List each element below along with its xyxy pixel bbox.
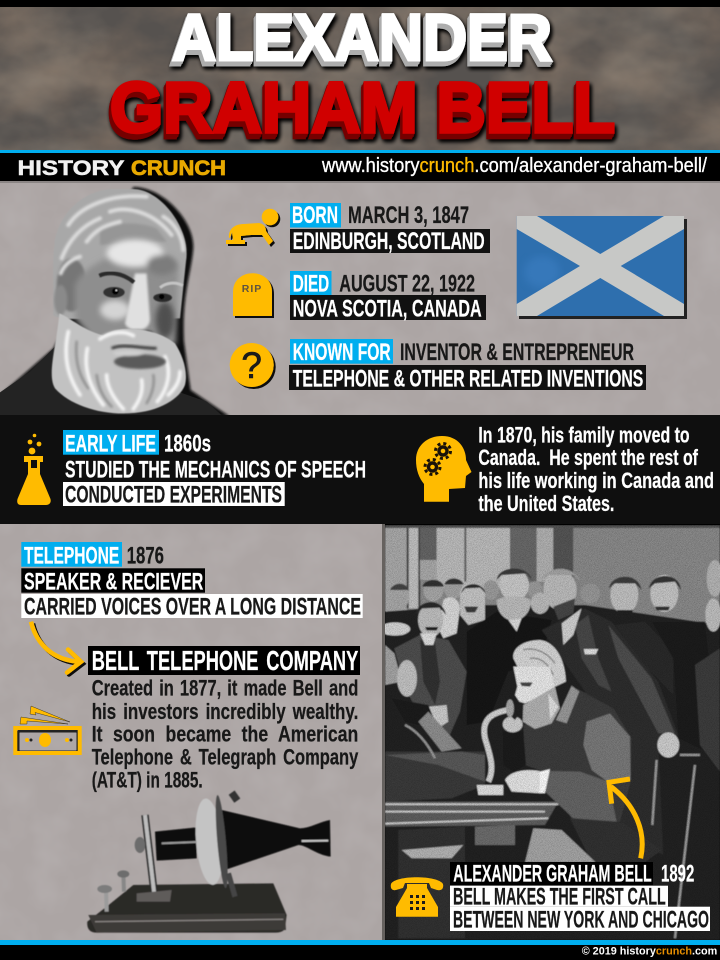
- torso: [523, 688, 632, 822]
- forehead highlight: [100, 239, 177, 338]
- company heading: [88, 645, 360, 676]
- man at left desk: [385, 645, 462, 752]
- panel: telephone background: [0, 524, 385, 940]
- chair: [652, 755, 700, 938]
- info: died: [233, 271, 486, 323]
- wall: [385, 525, 720, 625]
- panel: biography background: [0, 181, 720, 415]
- telephone text: TELEPHONE: [24, 542, 119, 569]
- beard: [523, 687, 560, 729]
- flag of Scotland: [517, 216, 687, 319]
- invention year: 1876: [127, 542, 164, 569]
- hand on table: [505, 770, 542, 793]
- caption: name: [450, 862, 653, 885]
- beard: [52, 313, 186, 413]
- info: born: EDINBURGH, SCOTLAND: [293, 228, 485, 255]
- speaker and receiver: [21, 568, 205, 593]
- family move paragraph: [478, 422, 714, 516]
- info: known for: [230, 339, 646, 393]
- experiments: [63, 482, 285, 506]
- portrait coat: [0, 347, 223, 417]
- face: [513, 667, 555, 703]
- long distance: [21, 594, 363, 618]
- info: born: [226, 202, 490, 255]
- highlights: [302, 838, 328, 844]
- eyes and brows: [99, 273, 183, 302]
- brand bar: [0, 150, 720, 181]
- nose: [123, 273, 153, 337]
- panel: early life band: [0, 415, 720, 524]
- icon: question mark: ?: [241, 345, 262, 386]
- bowing man: [541, 569, 679, 855]
- photo grain: [385, 525, 720, 940]
- company paragraph: [92, 676, 359, 793]
- Bell at telephone: [477, 640, 662, 862]
- hair highlights: [61, 196, 183, 273]
- caption: first call: [450, 886, 668, 907]
- decade: 1860s: [164, 431, 211, 458]
- collar: [556, 686, 579, 723]
- icon: question mark: [230, 343, 274, 387]
- head with mustache: [460, 583, 486, 625]
- left man: [394, 602, 467, 738]
- device base: [87, 883, 287, 933]
- early life text: CONDUCTED EXPERIMENTS: [65, 482, 282, 509]
- telephone text: SPEAKER & RECIEVER: [24, 568, 203, 595]
- death place: [290, 295, 486, 320]
- icon: tombstone: RIP: [242, 283, 262, 295]
- family move paragraph: the United States.: [478, 491, 614, 516]
- label: EARLY LIFE: [63, 430, 159, 455]
- company paragraph: Created in 1877, it made Bell and: [92, 676, 358, 701]
- bearded man: [467, 568, 552, 725]
- portrait of Bell: [0, 187, 230, 417]
- info: known for: KNOWN FOR: [293, 339, 391, 366]
- death date: AUGUST 22, 1922: [339, 271, 475, 298]
- company paragraph: Telephone & Telegraph Company: [92, 744, 359, 769]
- title line: ALEXANDER: ALEXANDER: [172, 0, 552, 74]
- icon: money: [15, 706, 80, 753]
- portrait hair: [53, 189, 187, 319]
- arrow: to company: [31, 622, 81, 672]
- studies: STUDIED THE MECHANICS OF SPEECH: [65, 457, 366, 484]
- telephone stand: [484, 710, 508, 782]
- image: Bell telephone device: [87, 793, 331, 933]
- cone: [222, 810, 331, 869]
- right men: [609, 575, 720, 772]
- title: [110, 0, 615, 148]
- lower coat: [570, 818, 662, 862]
- caption: year: 1892: [661, 861, 694, 888]
- icon: telephone: [391, 877, 443, 917]
- header stone banner: [0, 7, 720, 150]
- sleeve: [583, 713, 631, 781]
- early life text: [63, 430, 366, 509]
- label: DIED: [290, 271, 332, 295]
- title line: GRAHAM BELL: GRAHAM BELL: [110, 69, 615, 148]
- website url: www.historycrunch.com/alexander-graham-bell/: [321, 155, 707, 177]
- company heading: BELL TELEPHONE COMPANY: [92, 645, 358, 676]
- hand at receiver: [503, 716, 523, 732]
- icon: tombstone: [233, 273, 272, 316]
- footer: [0, 940, 720, 960]
- photograph: Bell making the first call: [380, 525, 720, 940]
- label: KNOWN FOR: [290, 339, 393, 364]
- flowers: [380, 622, 410, 636]
- portrait shadow: [0, 187, 230, 417]
- mouth: [112, 346, 166, 369]
- company paragraph: (AT&T) in 1885.: [92, 768, 203, 793]
- icon: head with gears: [416, 436, 472, 502]
- photo caption: [450, 861, 710, 934]
- icon: flask: [17, 434, 51, 505]
- hair: [513, 640, 566, 688]
- back row heads: [390, 560, 720, 632]
- birth place: [290, 229, 490, 253]
- rear cylinder: [155, 827, 197, 861]
- info: born: BORN: [292, 202, 338, 229]
- logo: HISTORY: HISTORY: [18, 157, 124, 180]
- early life text: EARLY LIFE: [65, 431, 156, 458]
- caption: cities: [450, 907, 710, 931]
- telephone text: CARRIED VOICES OVER A LONG DISTANCE: [24, 594, 361, 621]
- head with white beard: [438, 597, 460, 638]
- hair shading: [57, 223, 167, 312]
- icon: crawling baby: [226, 209, 278, 245]
- telephone text: [21, 542, 363, 621]
- birth date: MARCH 3, 1847: [348, 202, 469, 229]
- company paragraph: It soon became the American: [92, 722, 358, 747]
- label: BORN: [290, 203, 341, 228]
- arm holding receiver: [523, 741, 526, 766]
- logo: CRUNCH: CRUNCH: [131, 157, 226, 180]
- info: died: DIED: [293, 271, 329, 298]
- beard strands: [66, 332, 180, 409]
- crowd mass: [385, 605, 720, 940]
- cloth: [525, 828, 596, 862]
- arrow: to Bell: [609, 779, 642, 858]
- portrait face: [75, 252, 178, 348]
- info: died: NOVA SCOTIA, CANADA: [293, 296, 482, 323]
- desk: [385, 725, 558, 938]
- company paragraph: his investors incredibly wealthy.: [92, 699, 358, 724]
- lower sleeve: [545, 771, 617, 822]
- known inventions: [289, 365, 646, 390]
- disc: [192, 797, 226, 886]
- receiver: [507, 700, 523, 720]
- rod and bolts: [97, 793, 237, 912]
- copyright: © 2019 historycrunch.com: [582, 946, 718, 958]
- label: TELEPHONE: [21, 542, 122, 567]
- portrait ear: [54, 285, 67, 315]
